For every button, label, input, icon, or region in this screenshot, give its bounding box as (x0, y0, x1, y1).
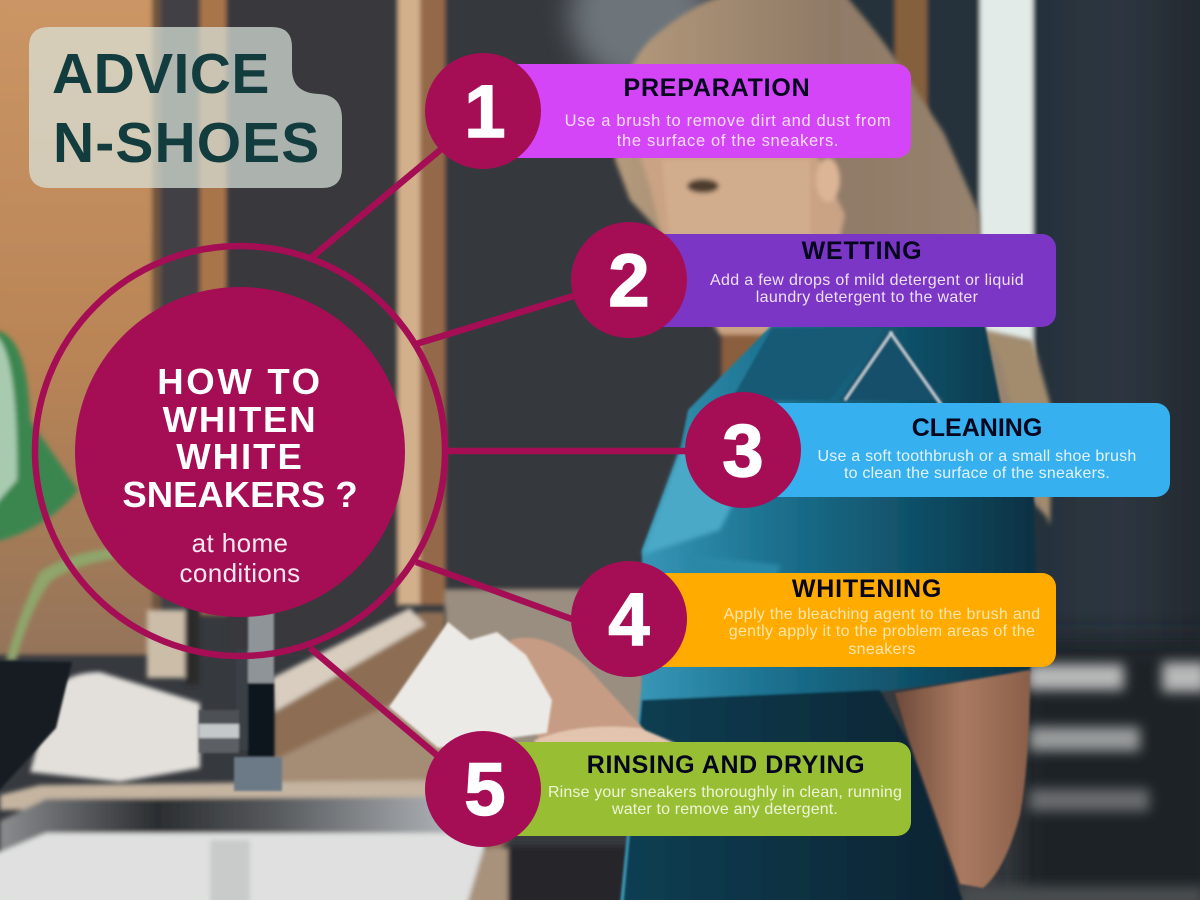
step 3: cleaning: CLEANING (912, 414, 1042, 442)
logo badge: N-SHOES (53, 111, 320, 175)
step 4: whitening: WHITENING (792, 575, 942, 603)
bottle (147, 590, 199, 685)
step 5: rinsing and drying: RINSING AND DRYING (587, 751, 865, 779)
step 2: wetting: laundry detergent to the water (756, 289, 978, 306)
logo badge (29, 27, 342, 188)
step 1: preparation: PREPARATION (623, 74, 811, 102)
plant (0, 330, 118, 660)
step 5: rinsing and drying: Rinse your sneakers thoroughly in clean, running (548, 784, 902, 801)
step 1: preparation: the surface of the sneakers. (617, 132, 839, 150)
bowl (0, 661, 72, 795)
step 1: preparation: 1 (464, 70, 506, 153)
hands and forearm (510, 638, 690, 760)
step 4: whitening: gently apply it to the problem areas of the (729, 623, 1035, 640)
step 5: rinsing and drying (425, 731, 911, 847)
step 3: cleaning (685, 392, 1170, 508)
step 1: preparation: Use a brush to remove dirt and dust from (565, 112, 891, 130)
faucet (199, 610, 282, 791)
step 2: wetting (571, 222, 1056, 338)
step 3: cleaning: Use a soft toothbrush or a small shoe brush (818, 448, 1136, 465)
central circle: title (75, 287, 405, 617)
central circle: title: SNEAKERS ? (122, 474, 358, 515)
woman: uniform (620, 325, 1036, 900)
step 4: whitening (571, 561, 1056, 677)
step 2: wetting: 2 (608, 239, 650, 322)
step 5: rinsing and drying: water to remove any detergent. (612, 801, 838, 818)
step 5: rinsing and drying: 5 (464, 748, 506, 831)
step 1: preparation (425, 53, 911, 169)
step 4: whitening: Apply the bleaching agent to the brush and (724, 606, 1040, 623)
central circle: title: WHITE (176, 436, 304, 477)
central circle: title: WHITEN (163, 399, 317, 440)
step 3: cleaning: to clean the surface of the sneakers. (844, 465, 1110, 482)
step 4: whitening: 4 (608, 578, 650, 661)
blurred windows on right (960, 662, 1200, 900)
sneaker (389, 622, 552, 748)
central circle: title: at home (192, 528, 288, 558)
central circle: title: HOW TO (157, 361, 323, 402)
central circle: title: conditions (179, 558, 301, 588)
step 2: wetting: WETTING (802, 237, 922, 265)
step 2: wetting: Add a few drops of mild detergent or liquid (710, 272, 1024, 289)
woman: arm (895, 670, 1030, 888)
logo badge: ADVICE (52, 42, 270, 106)
step 3: cleaning: 3 (722, 409, 764, 492)
towel (30, 672, 200, 782)
woman: hair (615, 0, 1052, 525)
counter, ledge and sink (0, 608, 638, 900)
step 4: whitening: sneakers (848, 641, 916, 658)
woman: face and ear (638, 150, 845, 335)
